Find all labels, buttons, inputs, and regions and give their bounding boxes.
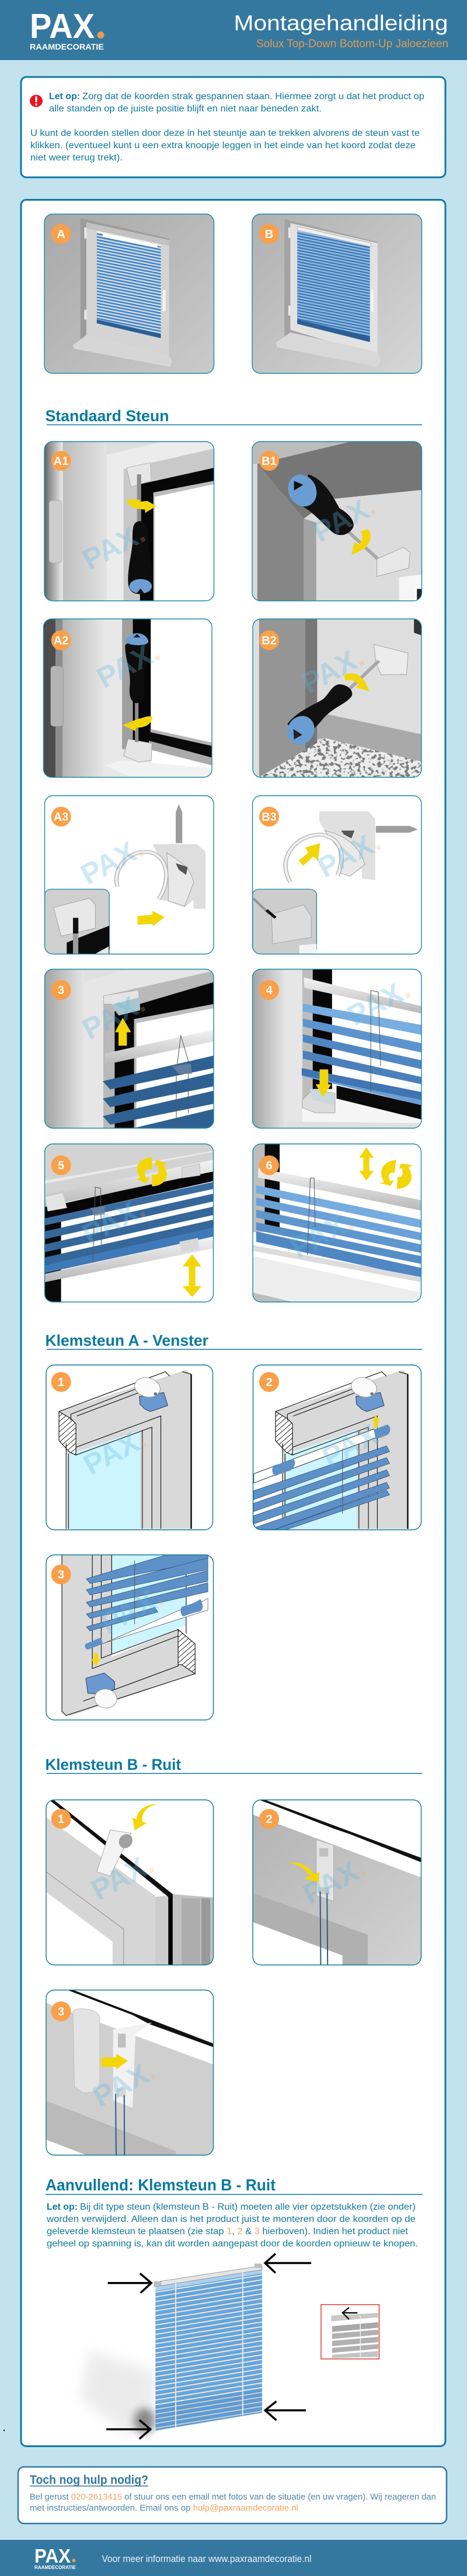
logo: PAX raamdecoratie: PAX — [30, 7, 95, 46]
note text: alle standen op de juiste positie blijft en niet naar beneden zakt. — [49, 104, 322, 114]
watermark: PAX. — [308, 489, 381, 549]
text block: let op: geleverde klemsteun te plaatsen (zie stap 1, 2 & 3 hierboven). Indien het product niet — [47, 2227, 409, 2236]
panel: main instructions — [21, 200, 445, 2446]
arrow: top left — [108, 2273, 151, 2293]
badge: 1 — [51, 1809, 71, 1829]
step B2: screwdriver and bottom bracket — [253, 619, 423, 779]
watermark: PAX. — [312, 824, 386, 884]
heading: Klemsteun B - Ruit: Klemsteun B - Ruit — [46, 1756, 181, 1773]
badge: A — [51, 224, 71, 244]
badge: 6: 6 — [266, 1160, 273, 1172]
arrow: rotate — [127, 499, 156, 513]
badge: B3: B3 — [262, 811, 277, 824]
step A: window with blind in sash — [44, 214, 214, 373]
badge: 2 — [259, 1809, 279, 1829]
watermark: PAX. — [77, 986, 151, 1046]
arrow: up and down — [359, 1147, 374, 1181]
badge: A1: A1 — [54, 455, 68, 468]
inset: screw detail — [45, 889, 109, 954]
badge: 5 — [51, 1156, 71, 1175]
badge: 3 — [51, 980, 71, 1000]
badge: 2: 2 — [266, 1813, 273, 1826]
step 4: click bottom rail — [252, 969, 421, 1128]
badge: B1: B1 — [262, 455, 277, 468]
watermark: PAX. — [285, 1205, 359, 1265]
arrow: top right — [265, 2253, 311, 2273]
arrow: curved — [288, 1863, 319, 1882]
watermark: PAX. — [86, 1847, 159, 1907]
arrow: rotate — [123, 716, 152, 731]
inset: detail in red frame — [321, 2305, 379, 2359]
note text: Let op: — [49, 92, 80, 102]
small speck — [4, 2430, 5, 2431]
badge: 6 — [259, 1156, 279, 1175]
step A1: screwdriver on top bracket — [44, 442, 214, 601]
footer banner — [0, 2540, 467, 2576]
subtitle: Solux Top-Down Bottom-Up Jaloezieen — [256, 38, 448, 50]
text block: let op: Let op: — [47, 2202, 78, 2212]
text block: let op: Bij dit type steun (klemsteun B - Ruit) moeten alle vier opzetstukken (zie onder) — [80, 2202, 416, 2212]
note text: klikken. (eventueel kunt u een extra knoopje leggen in het einde van het koord zodat deze — [30, 141, 416, 150]
arrow: down — [316, 1069, 331, 1097]
watermark: PAX. — [342, 972, 416, 1032]
heading: Standaard Steun: Standaard Steun — [46, 407, 169, 425]
step A2: screwdriver on bottom bracket — [43, 619, 212, 778]
watermark: PAX. — [298, 1851, 371, 1911]
icon: red exclamation — [30, 94, 43, 107]
heading: Klemsteun A - Venster: Klemsteun A - Venster — [46, 1332, 208, 1349]
badge: A1 — [51, 451, 71, 471]
badge: 3 — [51, 1564, 71, 1584]
help text — [30, 2492, 436, 2513]
watermark: PAX. — [296, 640, 370, 700]
badge: 3: 3 — [58, 984, 64, 997]
note text — [30, 92, 424, 163]
arrow: diagonal — [299, 843, 320, 866]
arrow: down — [92, 1654, 100, 1666]
watermark: PAX. — [92, 635, 165, 695]
badge: 3 — [51, 2001, 71, 2021]
text block: let op: geheel op spanning is, kan dit worden aangepast door de koorden opnieuw te knopen. — [47, 2239, 418, 2249]
step 3: hang top rail — [44, 969, 214, 1128]
arrow: rotate cycle — [137, 1157, 168, 1186]
footer text: Voor meer informatie naar www.paxraamdecoratie.nl — [102, 2554, 312, 2564]
badge: 3: 3 — [58, 2006, 64, 2018]
help text: met instructies/antwoorden. Email ons op hulp@paxraamdecoratie.nl — [30, 2503, 298, 2513]
watermark: PAX. — [95, 1580, 169, 1640]
badge: B2 — [259, 631, 279, 650]
badge: 4: 4 — [266, 984, 273, 997]
arrow: curved — [133, 1804, 158, 1831]
Klemsteun A step 1 — [46, 1365, 212, 1530]
arrow: up — [115, 1018, 131, 1046]
note text: Zorg dat de koorden strak gespannen staan. Hiermee zorgt u dat het product op — [82, 92, 424, 102]
illustration: blind with arrows — [81, 2253, 311, 2439]
arrow: bottom right — [265, 2402, 306, 2420]
badge: A: A — [57, 228, 65, 241]
Klemsteun B step 1 — [46, 1800, 214, 1965]
badge: 2: 2 — [266, 1376, 273, 1389]
step 5: tilt and raise rail — [44, 1144, 214, 1302]
Klemsteun A step 2 — [253, 1365, 421, 1530]
badge: 3: 3 — [58, 1569, 64, 1581]
arrow: up and down — [183, 1254, 201, 1297]
step B: window with blind on frame — [252, 214, 421, 373]
heading: help: Toch nog hulp nodig? — [30, 2473, 148, 2487]
Klemsteun B step 2 — [253, 1800, 421, 1965]
header banner — [0, 0, 467, 60]
arrow: detail — [343, 2308, 357, 2319]
badge: B3 — [259, 807, 279, 827]
text block: let op — [46, 2202, 418, 2249]
watermark: PAX. — [317, 1414, 391, 1474]
badge: 4 — [259, 980, 279, 1000]
step A3: clip click onto bracket — [44, 796, 214, 954]
badge: B: B — [265, 228, 273, 241]
badge: B2: B2 — [262, 635, 277, 648]
help text: Bel gerust 020-2613415 of stuur ons een email met fotos van de situatie (en uw vragen). Wij reageren dan — [30, 2492, 436, 2502]
logo: PAX raamdecoratie: RAAMDECORATIE — [30, 42, 104, 51]
footer logo: RAAMDECORATIE — [34, 2565, 76, 2570]
badge: A3: A3 — [54, 811, 68, 824]
watermark: PAX. — [75, 831, 149, 891]
badge: 5: 5 — [58, 1160, 64, 1172]
badge: 1 — [51, 1372, 71, 1392]
arrow: rotate — [344, 673, 370, 691]
badge: 1: 1 — [58, 1376, 64, 1389]
panel: help box — [18, 2467, 447, 2524]
step B1: screwdriver in reveal — [252, 442, 421, 601]
step 6: tilt and raise rail light — [253, 1144, 421, 1302]
arrow: rotate — [351, 529, 371, 555]
note text: niet weer terug trekt). — [30, 153, 123, 163]
badge: A3 — [51, 807, 71, 827]
badge: A2 — [51, 631, 71, 650]
watermark: PAX. — [88, 2053, 161, 2113]
Klemsteun A step 3 — [46, 1555, 214, 1720]
heading: Aanvullend: Aanvullend: Klemsteun B - Ruit — [46, 2176, 276, 2194]
badge: 2 — [259, 1372, 279, 1392]
text block: let op: worden verwijderd. Alleen dan is het product juist te monteren door de koorden op de — [46, 2214, 416, 2224]
Klemsteun B step 3 — [46, 1990, 214, 2155]
panel: let op note — [21, 77, 445, 177]
badge: A2: A2 — [54, 635, 68, 648]
arrow: up — [372, 1415, 379, 1427]
title: Montagehandleiding — [234, 11, 448, 35]
arrow: bottom left — [106, 2420, 151, 2439]
inset: screw detail — [253, 889, 316, 954]
footer logo: PAX — [34, 2545, 71, 2567]
note text: U kunt de koorden stellen door deze in het steuntje aan te trekken alvorens de steun vast te — [30, 128, 420, 138]
watermark: PAX. — [78, 1422, 152, 1482]
watermark: PAX. — [77, 1191, 151, 1251]
arrow: rotate cycle — [380, 1160, 413, 1189]
badge: 1: 1 — [58, 1813, 64, 1826]
badge: B — [259, 224, 279, 244]
badge: B1 — [259, 451, 279, 471]
section: Aanvullend Klemsteun B — [46, 2176, 423, 2439]
arrow: right — [138, 911, 165, 926]
watermark: PAX. — [77, 516, 151, 576]
arrow: right — [101, 2054, 128, 2070]
step B3: clip click onto bracket — [252, 796, 421, 954]
